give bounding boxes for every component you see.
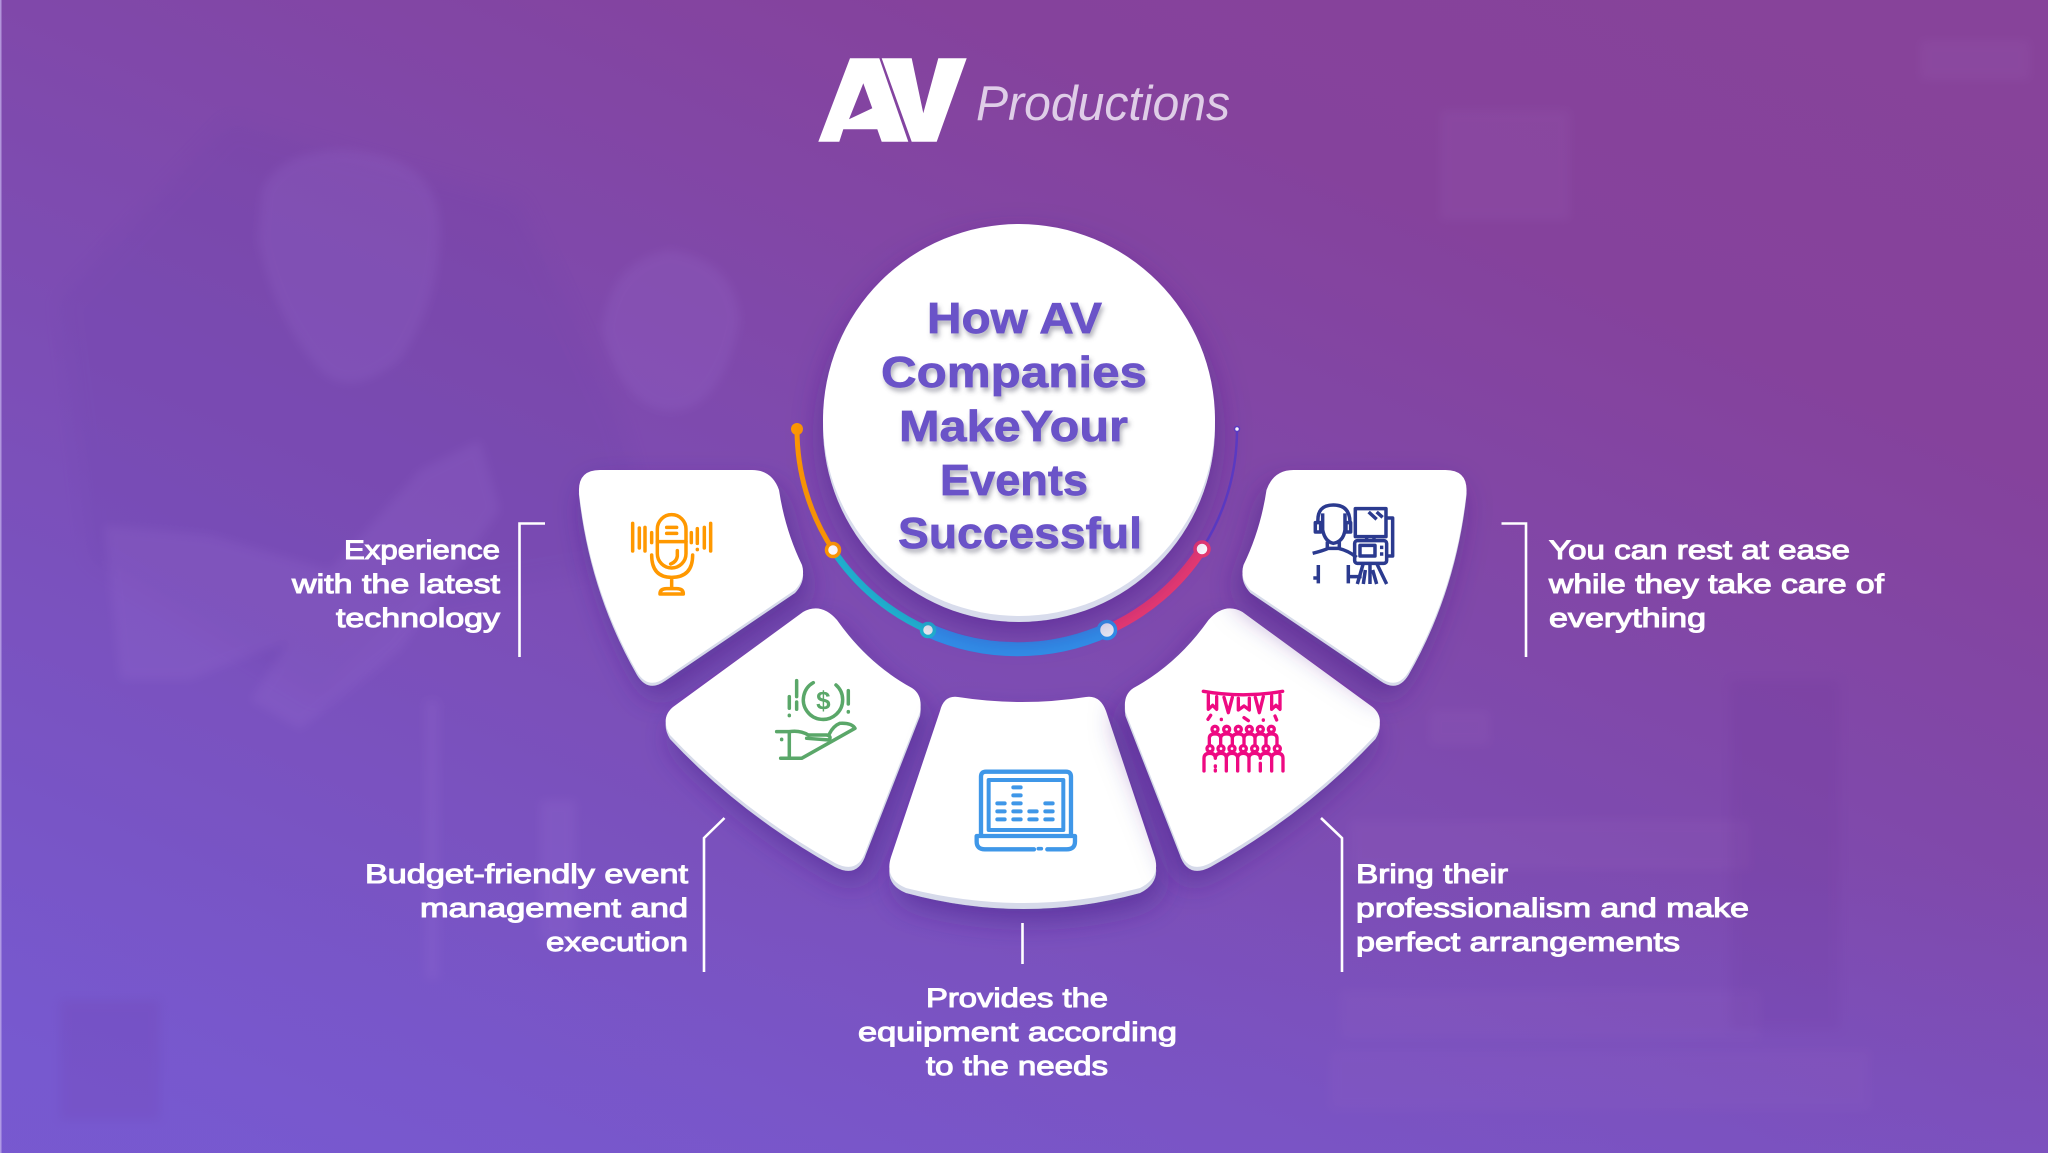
title: How AV: [927, 294, 1103, 343]
callout: rest at ease: while they take care of: [1548, 569, 1885, 599]
callout: provides the equipment: to the needs: [926, 1051, 1108, 1081]
logo mark: AV: [818, 58, 967, 142]
timeline arc with nodes: [791, 423, 1240, 649]
callout: rest at ease: You can rest at ease: [1549, 535, 1850, 565]
card: equipment (laptop): [889, 697, 1156, 909]
callout: rest at ease: [1502, 524, 1885, 657]
callout: budget-friendly event management: execution: [546, 927, 688, 957]
icon: hand with dollar coin: $: [816, 685, 831, 715]
card: technology (microphone): [579, 470, 803, 686]
callout: experience with the latest technology: Experience: [344, 535, 500, 565]
title: Successful: [898, 509, 1142, 558]
callout: experience with the latest technology: with the latest: [291, 569, 501, 599]
logo: AV Productions: [818, 58, 1230, 142]
callout: provides the equipment: [858, 923, 1177, 1081]
callout: professionalism and arrangements: perfect arrangements: [1356, 927, 1680, 957]
logo word: Productions: Productions: [976, 77, 1230, 131]
card: budget (hand with coin): [666, 608, 921, 871]
callout: budget-friendly event management: management and: [420, 893, 688, 923]
callout: professionalism and arrangements: [1321, 818, 1749, 972]
callout: professionalism and arrangements: professionalism and make: [1356, 893, 1749, 923]
icon: camera operator: [1313, 505, 1393, 584]
callout: budget-friendly event management: Budget-friendly event: [365, 859, 689, 889]
callout: budget-friendly event management: [365, 818, 724, 972]
card: professionalism (crowd): [1125, 608, 1380, 871]
title: MakeYour: [899, 402, 1128, 451]
callout: experience with the latest technology: technology: [336, 603, 501, 633]
card: rest at ease (camera operator): [1242, 470, 1467, 686]
central circle with title: [823, 224, 1215, 622]
title: Events: [940, 456, 1088, 505]
callout: provides the equipment: equipment according: [858, 1017, 1177, 1047]
icon: laptop with equaliser: [977, 772, 1075, 849]
title: [881, 294, 1147, 558]
icon: crowd with bunting: [1203, 691, 1283, 771]
title: Companies: [881, 348, 1147, 397]
callout: professionalism and arrangements: Bring their: [1356, 859, 1508, 889]
icon: microphone: [633, 515, 711, 594]
callout: experience with the latest technology: [291, 524, 545, 657]
callout: provides the equipment: Provides the: [926, 983, 1108, 1013]
callout: rest at ease: everything: [1549, 603, 1706, 633]
icon: hand with dollar coin: [777, 681, 855, 758]
